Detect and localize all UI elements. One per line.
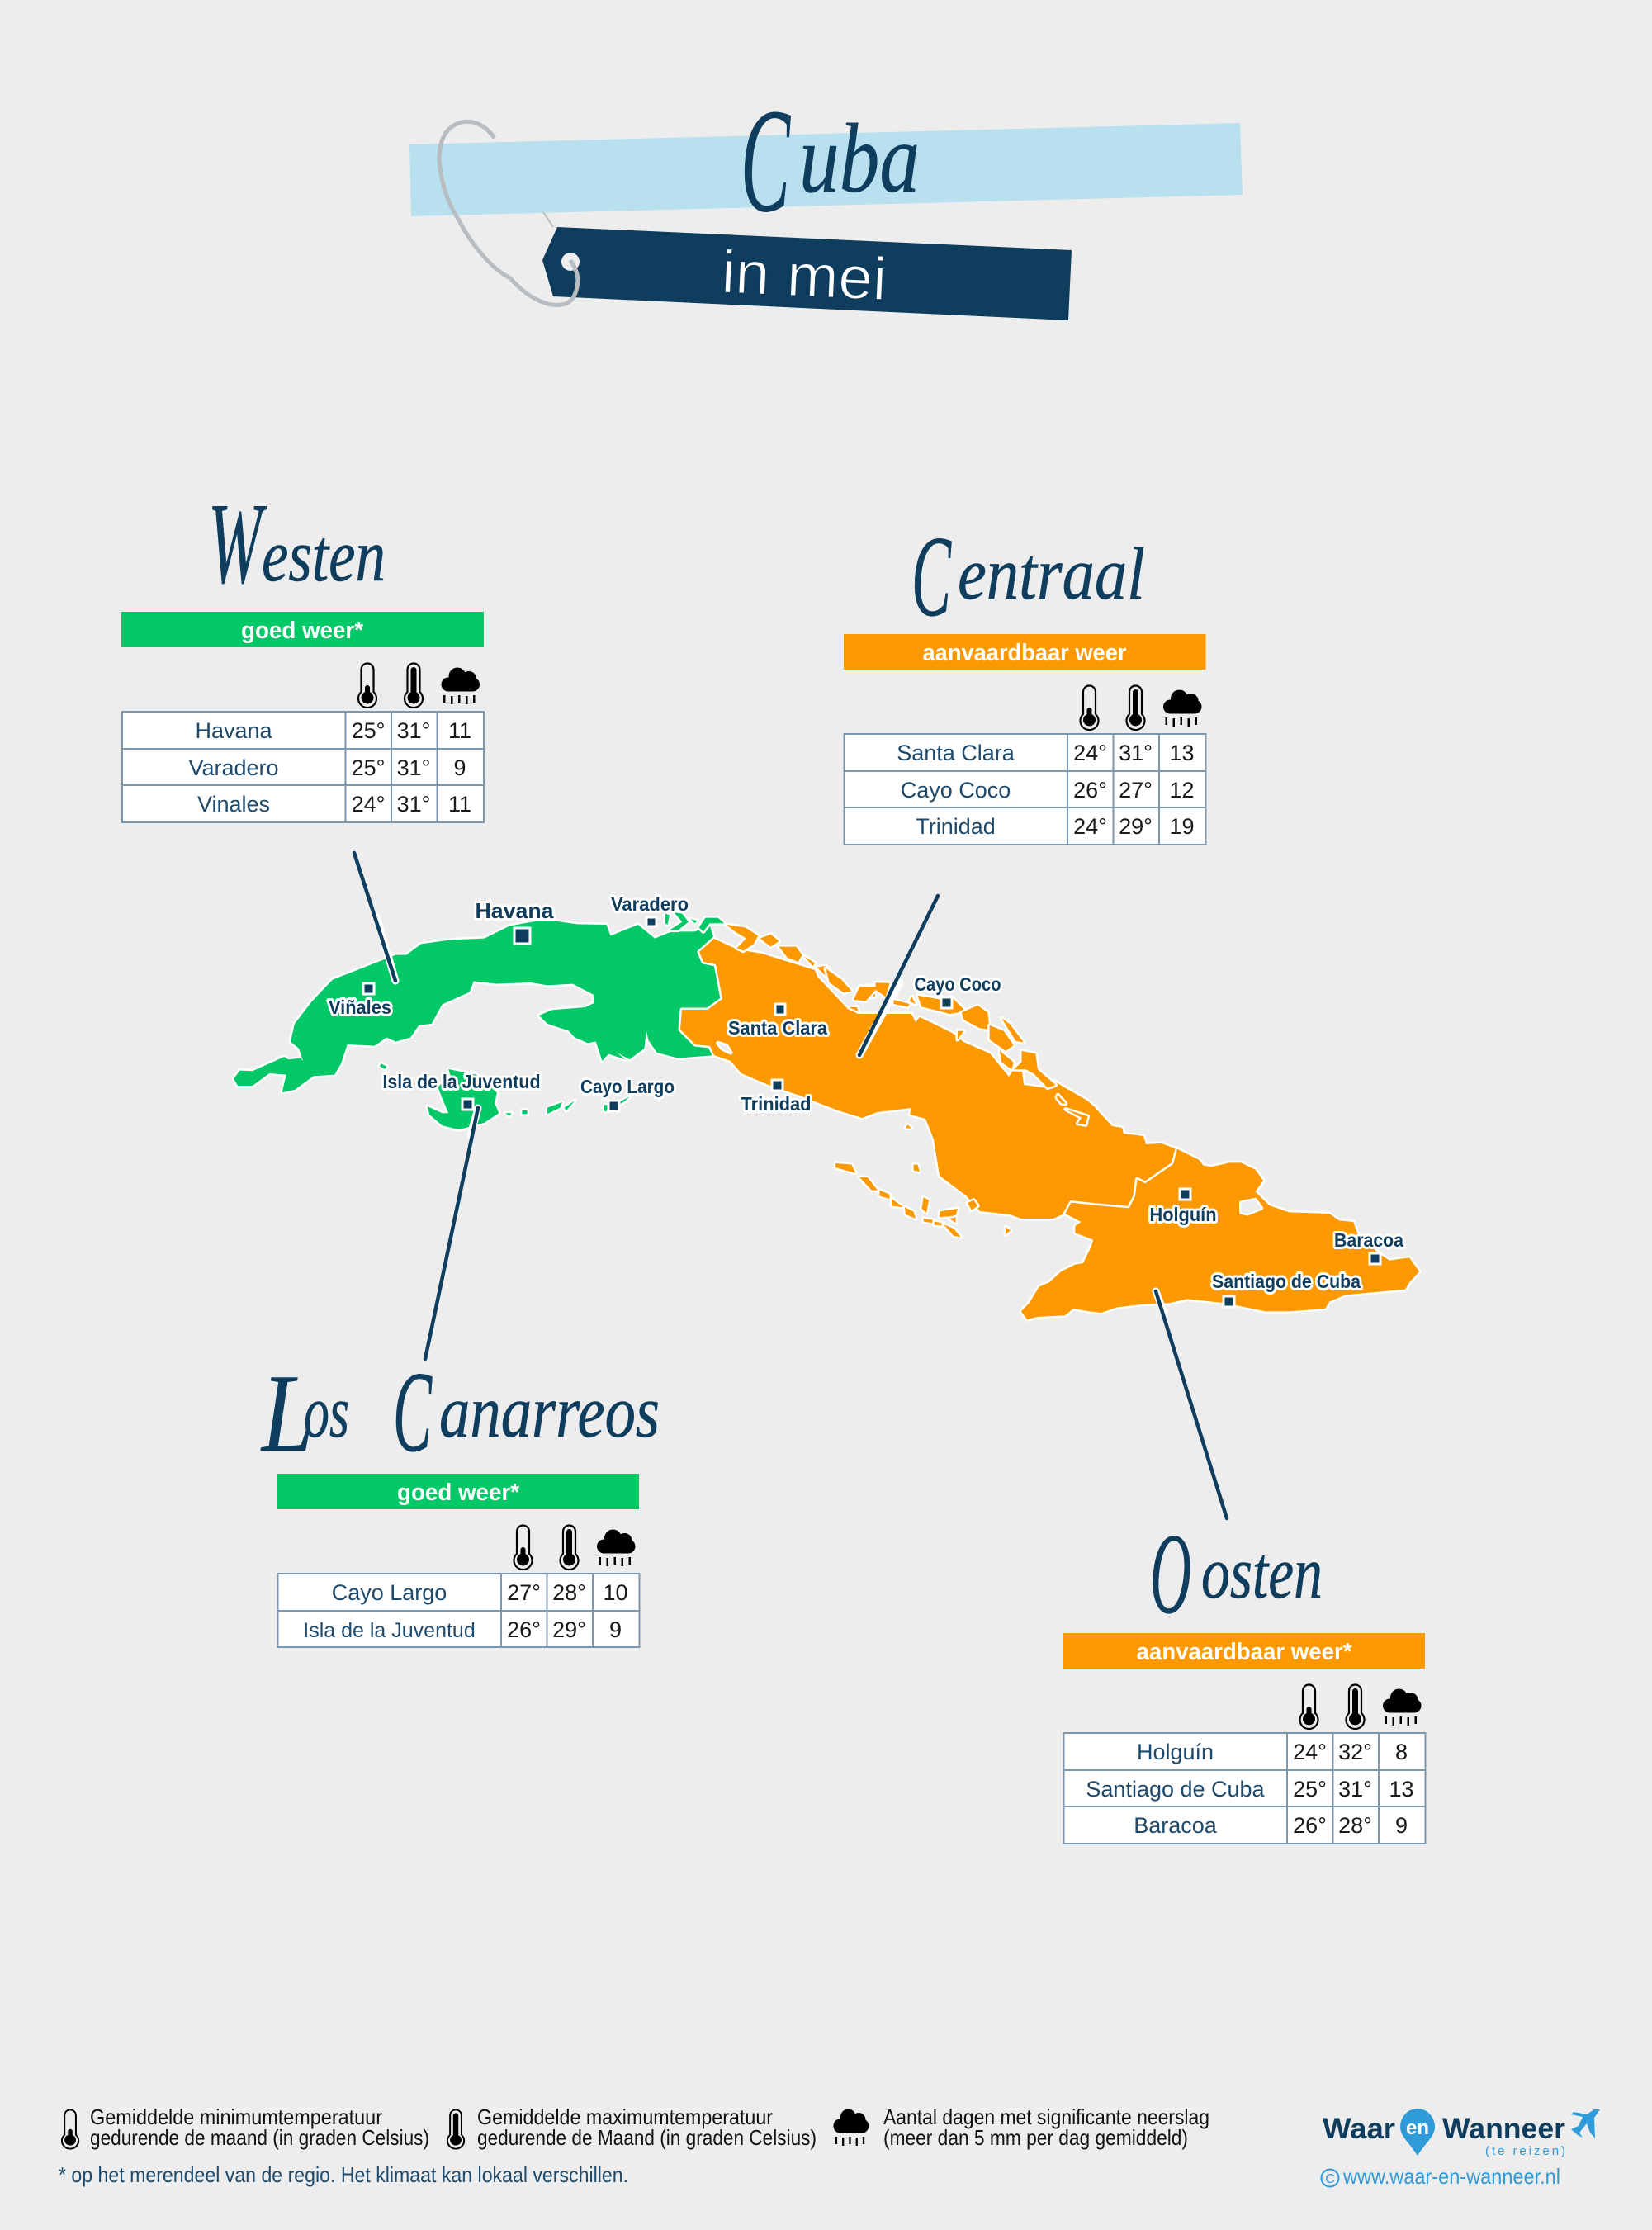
weather banner: goed weer* [241,618,364,644]
table: Westen: Varadero [188,755,279,780]
table: Oosten: Santiago de Cuba [1086,1777,1266,1802]
icons: temperature and rain [358,664,480,708]
table: Oosten: 24° [1293,1740,1327,1764]
table: Centraal: Santa Clara [897,741,1015,765]
tag string [543,212,553,227]
table: Centraal: 24° [1073,814,1107,839]
title: Cuba: uba [799,103,920,213]
table: Oosten [1063,1733,1425,1844]
legend text: rain days: (meer dan 5 mm per dag gemiddeld) [883,2125,1188,2150]
subtitle: in mei: in mei [720,239,888,313]
table: Westen: 11 [448,792,471,817]
icon: maximum temperature [447,2109,464,2149]
title: Cuba [741,78,920,243]
heading: Los Canarreos [260,1348,660,1476]
table: Westen: 11 [448,718,471,743]
city: Santiago de Cuba: Santiago de Cuba [1212,1271,1361,1292]
title tag [409,78,1243,320]
weather banner [1063,1633,1425,1669]
icon: map pin [1400,2109,1435,2156]
city: Varadero [611,893,689,926]
city: Baracoa: Baracoa [1334,1229,1403,1251]
cays north and south of Centraal [826,968,1087,1237]
table: Oosten: Baracoa [1134,1813,1218,1838]
table: Oosten: 13 [1389,1777,1414,1802]
table: Centraal: 26° [1073,778,1107,803]
city: Santa Clara: Santa Clara [728,1017,827,1039]
icon: copyright: C [1325,2172,1335,2186]
heading: Centraal: C [911,513,952,641]
heading: Centraal [911,513,1145,641]
icon: minimum temperature [62,2109,78,2149]
city: Santiago de Cuba [1212,1271,1361,1307]
region: Westen (green) [234,912,724,1129]
tagline: (te reizen) [1485,2144,1565,2158]
table: Oosten: 28° [1338,1813,1372,1838]
heading: Oosten: osten [1201,1532,1323,1614]
table: Westen: 25° [352,718,385,743]
city: Santa Clara [728,1004,827,1039]
table: Westen: 31° [397,718,430,743]
legend text: maximum temperature [477,2105,817,2150]
city: Cayo Coco: Cayo Coco [915,973,1001,995]
icons: temperature and rain [1299,1684,1422,1729]
weather banner [121,612,484,647]
table: Centraal [844,734,1205,845]
table: Centraal: 19 [1169,814,1195,839]
city: Trinidad [741,1080,811,1115]
tag ring [439,121,578,305]
cays north-west of Centraal [718,925,875,1053]
panel: Los Canarreos [260,1348,660,1647]
leader line: Westen [354,853,395,981]
pin word: en: en [1406,2117,1429,2139]
heading: Oosten: O [1150,1510,1191,1638]
table: Oosten: 26° [1293,1813,1327,1838]
table: Oosten: Holguín [1137,1740,1214,1764]
icons: temperature and rain [1080,685,1202,730]
legend text: minimum temperature: gedurende de maand (in graden Celsius) [90,2125,429,2150]
city: Cayo Coco [915,973,1001,1008]
table: Westen: 31° [397,792,430,817]
heading: Westen: esten [262,515,386,597]
weather banner: goed weer* [397,1480,520,1506]
heading: Los Canarreos: anarreos [439,1371,660,1453]
table: Centraal: Trinidad [916,814,996,839]
city: Viñales: Viñales [329,997,391,1018]
table: Centraal: 31° [1119,741,1153,765]
city: Holguín: Holguín [1149,1204,1217,1225]
table: Los Canarreos: 10 [603,1580,628,1605]
panel: Centraal [844,513,1205,845]
icons: temperature and rain [514,1526,636,1570]
table: Los Canarreos: 28° [552,1580,586,1605]
weather banner [844,634,1205,670]
table: Oosten: 9 [1395,1813,1408,1838]
table: Centraal: 12 [1169,778,1195,803]
leader line: Los Canarreos [425,1108,478,1359]
city: Havana [476,898,554,944]
icon: rain days [833,2109,869,2146]
city: Isla de la Juventud: Isla de la Juventud [383,1071,540,1092]
heading: Los Canarreos: os [304,1371,349,1453]
leader line: Centraal [859,896,938,1055]
legend text: maximum temperature: Gemiddelde maximumtemperatuur [477,2105,773,2129]
table: Oosten: 32° [1338,1740,1372,1764]
panel: Oosten [1063,1510,1425,1844]
heading: Westen: W [208,480,267,608]
city: Trinidad: Trinidad [741,1093,811,1115]
table: Los Canarreos: Cayo Largo [332,1580,447,1605]
table: Westen: Vinales [197,792,270,817]
weather banner: aanvaardbaar weer* [1136,1639,1352,1665]
heading: Oosten [1150,1510,1323,1638]
wordmark: Wanneer: Wanneer [1442,2113,1565,2145]
city: Holguín [1149,1189,1217,1225]
logo: Waar en Wanneer [1321,2109,1600,2189]
website: www.waar-en-wanneer.nl [1342,2164,1560,2189]
table: Los Canarreos: 9 [609,1617,622,1642]
table: Centraal: 29° [1119,814,1153,839]
icon: copyright [1321,2170,1339,2186]
table: Centraal: 24° [1073,741,1107,765]
table: Los Canarreos: Isla de la Juventud [303,1619,476,1642]
table: Westen: 25° [352,755,385,780]
table: Los Canarreos: 27° [507,1580,541,1605]
table: Westen: 24° [352,792,385,817]
table: Centraal: 13 [1169,741,1195,765]
city: Cayo Largo: Cayo Largo [580,1076,675,1097]
table: Westen [122,712,484,822]
map of Cuba [234,853,1419,1518]
table: Westen: 9 [453,755,466,780]
city: Havana: Havana [476,898,554,923]
table: Oosten: 31° [1338,1777,1372,1802]
weather banner [277,1474,639,1509]
icon: airplane [1571,2109,1600,2138]
leader line: Oosten [1156,1291,1227,1518]
region: Oosten (orange) [1021,1149,1419,1319]
table: Oosten: 8 [1395,1740,1408,1764]
weather banner: aanvaardbaar weer [923,640,1126,666]
legend [59,2105,1209,2187]
wordmark: Waar: Waar [1323,2113,1395,2145]
table: Los Canarreos: 26° [507,1617,541,1642]
region: Centraal (orange) [680,939,1177,1219]
legend text: minimum temperature [90,2105,429,2150]
city: Cayo Largo [580,1076,675,1111]
city: Viñales [329,983,391,1018]
panel: Westen [121,480,484,822]
heading: Los Canarreos: C [393,1348,433,1476]
table: Los Canarreos: 29° [552,1617,586,1642]
table: Centraal: 27° [1119,778,1153,803]
table: Los Canarreos [277,1574,639,1647]
heading: Los Canarreos: L [260,1352,314,1475]
legend text: rain days: Aantal dagen met significante neerslag [883,2105,1209,2129]
legend text: rain days [883,2105,1209,2150]
city: Isla de la Juventud [383,1071,540,1110]
title: Cuba: C [741,78,791,243]
heading: Centraal: entraal [958,533,1145,615]
table: Centraal: Cayo Coco [901,778,1011,803]
footnote: * op het merendeel van de regio. Het klimaat kan lokaal verschillen. [59,2162,628,2187]
table: Westen: 31° [397,755,430,780]
table: Westen: Havana [195,718,273,743]
legend text: maximum temperature: gedurende de Maand (in graden Celsius) [477,2125,817,2150]
legend text: minimum temperature: Gemiddelde minimumtemperatuur [90,2105,382,2129]
city: Baracoa [1334,1229,1403,1264]
heading: Westen [208,480,386,608]
city: Varadero: Varadero [611,893,689,915]
table: Oosten: 25° [1293,1777,1327,1802]
tag hole [561,253,580,271]
subtitle tag [542,227,1072,320]
title band [409,123,1243,216]
